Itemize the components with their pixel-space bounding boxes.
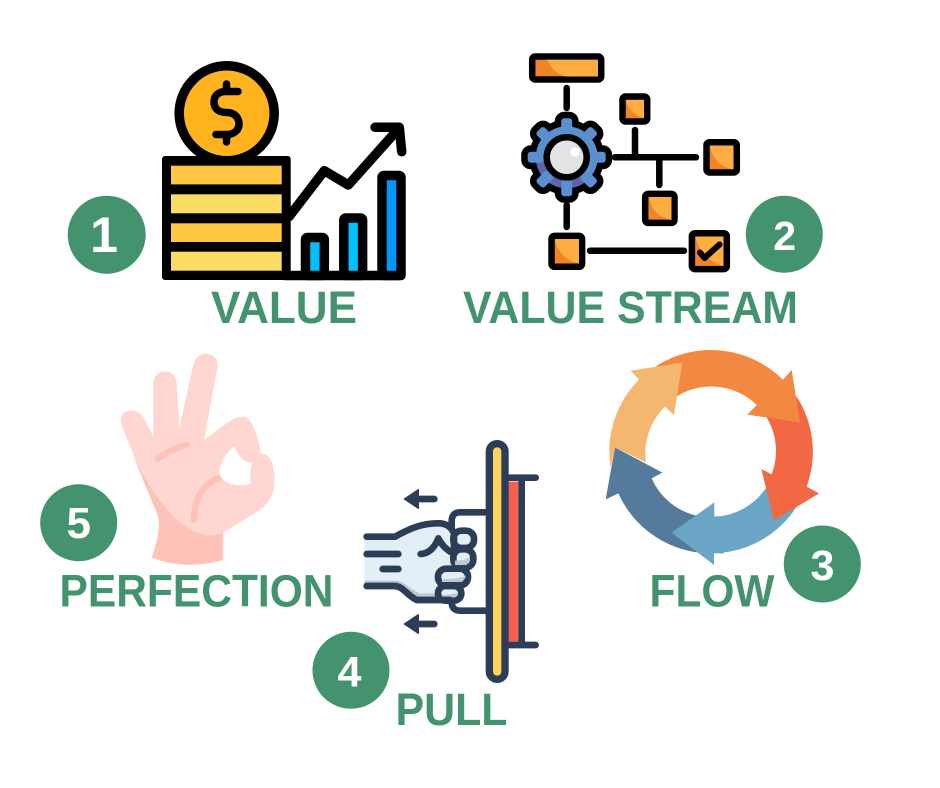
icon: ok hand gesture <box>121 354 275 565</box>
badge: number 5 <box>40 484 117 561</box>
label: value: VALUE <box>211 282 357 333</box>
label: perfection: PERFECTION <box>60 566 334 616</box>
badge: number 1 <box>68 196 146 274</box>
badge: number 1: 1 <box>90 207 118 263</box>
badge: number 5: 5 <box>67 499 91 548</box>
panel: value <box>68 66 402 333</box>
icon: circular arrows <box>606 350 819 565</box>
badge: number 2 <box>746 196 823 273</box>
panel: pull <box>312 444 536 735</box>
icon: gear process map <box>528 56 737 269</box>
panel: value stream <box>463 56 823 333</box>
icon: fist pulling handle <box>364 444 536 679</box>
badge: number 2: 2 <box>773 213 796 259</box>
badge: number 3: 3 <box>811 542 834 590</box>
label: pull: PULL <box>396 684 508 735</box>
badge: number 3 <box>784 526 861 602</box>
badge: number 4: 4 <box>338 648 362 696</box>
panel: flow <box>606 350 861 616</box>
label: value stream: VALUE STREAM <box>463 282 798 333</box>
badge: number 4 <box>312 632 390 709</box>
panel: perfection <box>40 354 333 616</box>
label: flow: FLOW <box>650 566 775 616</box>
icon: coin stack with rising chart <box>162 66 402 280</box>
